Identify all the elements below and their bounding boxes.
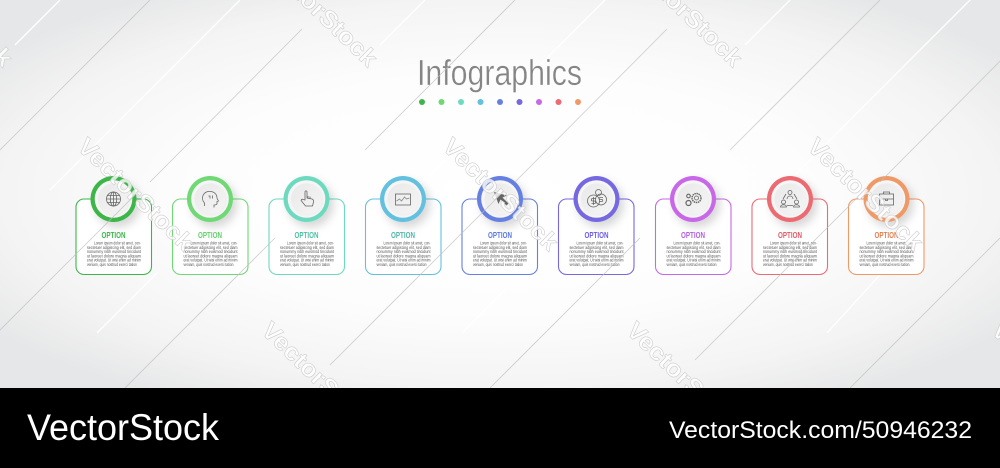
footer logo text: VectorStock: [27, 407, 219, 448]
watermarks: VectorStock: [437, 133, 564, 257]
panel: option 9: OPTION: [874, 230, 899, 240]
panel: option 9: [848, 176, 924, 274]
panel: option 6: erat volutpat. Ut wisi enim ad minim: [570, 258, 624, 263]
panel: option 1: erat volutpat. Ut wisi enim ad minim: [87, 258, 141, 263]
panel: option 3: sectetuer adipiscing elit, sed diam: [280, 245, 334, 250]
footer band: [0, 388, 1000, 468]
panel: option 3: [269, 176, 344, 274]
panel: option 4: erat volutpat. Ut wisi enim ad minim: [376, 258, 431, 263]
panel: option 5: nonummy nibh euismod tincidunt: [473, 249, 528, 254]
panel: option 7: [656, 176, 731, 274]
title: Infographics: [417, 52, 582, 93]
panel: option 3: nonummy nibh euismod tincidunt: [280, 249, 335, 254]
panel: option 4: veniam, quis nostrud exerci tation: [376, 262, 427, 267]
panel: option 7: sectetuer adipiscing elit, sed diam: [666, 245, 721, 250]
panel: option 8: nonummy nibh euismod tincidunt: [763, 249, 818, 254]
panel: option 9: ut laoreet dolore magna aliquam: [860, 253, 914, 258]
panel: option 7: OPTION: [681, 230, 705, 240]
panel: option 5: ut laoreet dolore magna aliquam: [473, 253, 527, 258]
panel: option 9: veniam, quis nostrud exerci tation: [860, 262, 910, 267]
panel: option 4: sectetuer adipiscing elit, sed diam: [376, 245, 431, 250]
panel: option 6: [558, 176, 634, 274]
icon: hand: [301, 191, 314, 206]
panel: option 1: [76, 176, 152, 274]
panel: option 6: OPTION: [584, 230, 609, 240]
panel: option 8: sectetuer adipiscing elit, sed diam: [763, 245, 817, 250]
panel: option 1: OPTION: [102, 230, 126, 240]
panel: option 9: erat volutpat. Ut wisi enim ad minim: [860, 258, 914, 263]
panel: option 8: OPTION: [778, 230, 802, 240]
panel: option 1: nonummy nibh euismod tincidunt: [87, 249, 142, 254]
panel: option 2: erat volutpat. Ut wisi enim ad minim: [184, 258, 238, 263]
panel: option 4: Lorem ipsum dolor sit amet, con-: [384, 240, 431, 246]
panel: option 3: OPTION: [294, 230, 319, 240]
panel: option 5: [462, 176, 538, 274]
panel: option 3: Lorem ipsum dolor sit amet, con-: [287, 240, 334, 246]
icon: globe: [106, 192, 120, 206]
panel: option 6: sectetuer adipiscing elit, sed diam: [570, 245, 624, 250]
panel: option 8: veniam, quis nostrud exerci tation: [763, 262, 814, 267]
watermarks: VectorStock: [72, 133, 199, 257]
panel: option 6: nonummy nibh euismod tincidunt: [570, 249, 624, 254]
panel: option 1: sectetuer adipiscing elit, sed diam: [87, 245, 141, 250]
panel: option 9: nonummy nibh euismod tincidunt: [860, 249, 914, 254]
panel: option 5: OPTION: [488, 230, 512, 240]
title dots: [419, 99, 581, 105]
panel: option 1: Lorem ipsum dolor sit amet, con-: [94, 240, 141, 246]
panel: option 2: nonummy nibh euismod tincidunt: [184, 249, 238, 254]
panel: option 5: veniam, quis nostrud exerci tation: [473, 262, 524, 267]
panel: option 7: ut laoreet dolore magna aliquam: [666, 253, 721, 258]
panel: option 5: erat volutpat. Ut wisi enim ad minim: [473, 258, 527, 263]
watermarks: VectorStock: [621, 317, 748, 441]
panel: option 1: ut laoreet dolore magna aliquam: [87, 253, 141, 258]
icon: three people: [780, 190, 800, 207]
panel: option 7: nonummy nibh euismod tincidunt: [666, 249, 721, 254]
panel: option 4: OPTION: [391, 230, 415, 240]
panel: option 7: Lorem ipsum dolor sit amet, con-: [674, 240, 721, 246]
panel: option 2: ut laoreet dolore magna aliquam: [184, 253, 238, 258]
panel: option 5: sectetuer adipiscing elit, sed diam: [473, 245, 527, 250]
watermarks: VectorStock: [256, 317, 383, 441]
panel: option 7: veniam, quis nostrud exerci tation: [666, 262, 717, 267]
panel: option 7: erat volutpat. Ut wisi enim ad minim: [666, 258, 721, 263]
panel: option 6: veniam, quis nostrud exerci tation: [570, 262, 620, 267]
icon: head: [202, 191, 218, 208]
icon: cursor arrow: [494, 192, 508, 206]
panel: option 4: nonummy nibh euismod tincidunt: [376, 249, 431, 254]
panel: option 3: ut laoreet dolore magna aliquam: [280, 253, 334, 258]
panel: option 2: [172, 176, 248, 274]
panel: option 2: Lorem ipsum dolor sit amet, con-: [190, 240, 238, 246]
footer url text: VectorStock.com/50946232: [669, 417, 972, 444]
panel: option 8: erat volutpat. Ut wisi enim ad minim: [763, 258, 817, 263]
icon: coins: [588, 190, 606, 207]
icon: gears: [686, 194, 701, 206]
panel: option 2: veniam, quis nostrud exerci tation: [184, 262, 234, 267]
icon: chart screen: [396, 194, 410, 205]
panel: option 1: veniam, quis nostrud exerci tation: [87, 262, 138, 267]
panel: option 6: ut laoreet dolore magna aliquam: [570, 253, 624, 258]
panel: option 3: veniam, quis nostrud exerci tation: [280, 262, 331, 267]
panel: option 8: ut laoreet dolore magna aliquam: [763, 253, 817, 258]
panel: option 4: ut laoreet dolore magna aliquam: [376, 253, 431, 258]
panel: option 8: [752, 176, 828, 274]
panel: option 9: Lorem ipsum dolor sit amet, con-: [866, 240, 914, 246]
panel: option 8: Lorem ipsum dolor sit amet, con-: [770, 240, 817, 246]
watermarks: VectorStock: [802, 133, 929, 257]
panel: option 6: Lorem ipsum dolor sit amet, con-: [576, 240, 624, 246]
panel: option 4: [366, 176, 441, 274]
panel: option 2: OPTION: [198, 230, 222, 240]
icon: briefcase: [880, 192, 894, 205]
panel: option 9: sectetuer adipiscing elit, sed diam: [860, 245, 914, 250]
panel: option 5: Lorem ipsum dolor sit amet, con-: [480, 240, 527, 246]
panel: option 3: erat volutpat. Ut wisi enim ad minim: [280, 258, 334, 263]
panel: option 2: sectetuer adipiscing elit, sed diam: [184, 245, 238, 250]
